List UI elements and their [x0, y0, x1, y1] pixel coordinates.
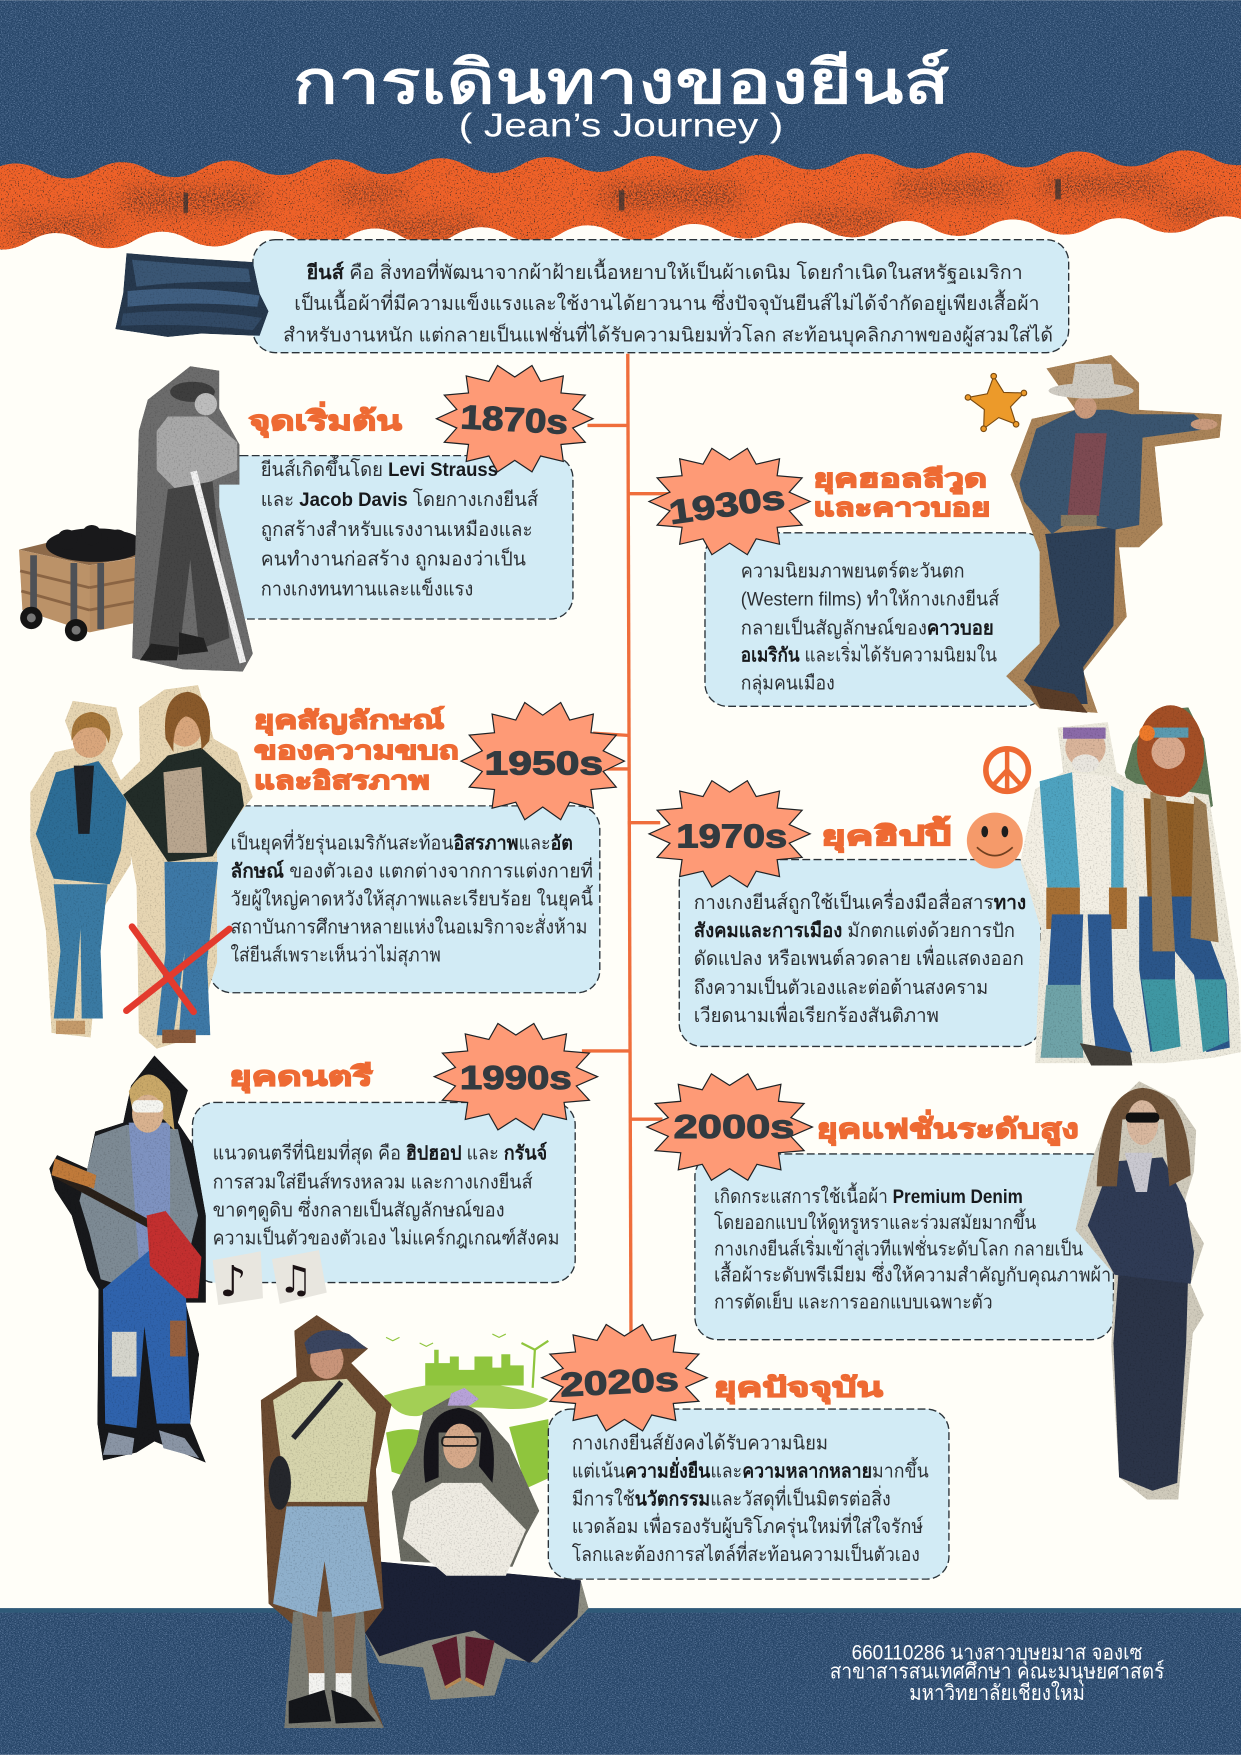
- orange torn wavy band: [0, 150, 1241, 250]
- photo: cowboy in denim: [1006, 355, 1222, 713]
- footer denim background: [0, 1608, 1241, 1755]
- subtitle: ( Jean’s Journey ): [459, 108, 783, 145]
- text: 1970s: สังคมและการเมือง มักตกแต่งด้วยการปัก: [694, 919, 1015, 942]
- intro text: สำหรับงานหนัก แต่กลายเป็นแฟชั่นที่ได้รับความนิยมทั่วโลก สะท้อนบุคลิกภาพของผู้สวมใส่ได้: [283, 321, 1053, 347]
- text: 1970s: ถึงความเป็นตัวเองและต่อต้านสงคราม: [694, 975, 988, 999]
- text: 2020s: มีการใช้นวัตกรรมและวัสดุที่เป็นมิตรต่อสิ่ง: [572, 1485, 891, 1511]
- heading: 1950s: ของความขบถ: [254, 738, 459, 765]
- icon: coal cart: [19, 525, 144, 641]
- footer credits: [830, 1641, 1164, 1705]
- badge: 1870s: [436, 366, 593, 472]
- photo: hippie couple: [1021, 705, 1241, 1065]
- heading: 2020s: ยุคปัจจุบัน: [714, 1373, 884, 1405]
- text: 1930s: กลุ่มคนเมือง: [741, 673, 835, 696]
- text: 1990s: แนวดนตรีที่นิยมที่สุด คือ ฮิปฮอป และ กรันจ์: [213, 1139, 547, 1165]
- text: 1870s: ยีนส์เกิดขึ้นโดย Levi Strauss: [261, 455, 498, 481]
- header denim background: [0, 0, 1241, 196]
- photo: young woman sitting: [364, 1388, 589, 1700]
- text: 2000s: เสื้อผ้าระดับพรีเมียม ซึ่งให้ความสำคัญกับคุณภาพผ้า: [714, 1260, 1111, 1287]
- panel: 2020s: [261, 1315, 949, 1728]
- panel: 1990s: [49, 1023, 598, 1463]
- badge: 1930s: 1930s: [667, 479, 787, 532]
- intro text: ยีนส์ คือ สิ่งทอที่พัฒนาจากผ้าฝ้ายเนื้อหยาบให้เป็นผ้าเดนิม โดยกำเนิดในสหรัฐอเมริกา: [306, 258, 1023, 284]
- text: 2020s: แวดล้อม เพื่อรองรับผู้บริโภครุ่นใหม่ที่ใส่ใจรักษ์: [572, 1513, 924, 1539]
- text: 1950s: วัยผู้ใหญ่คาดหวังให้สุภาพและเรียบร้อย ในยุคนี้: [231, 884, 593, 911]
- text: 1950s: ลักษณ์ ของตัวเอง แตกต่างจากการแต่งกายที่: [231, 858, 593, 883]
- heading: 2000s: ยุคแฟชั่นระดับสูง: [817, 1109, 1079, 1146]
- text: 2020s: กางเกงยีนส์ยังคงได้รับความนิยม: [572, 1431, 828, 1454]
- timeline spine and branches: [582, 354, 671, 1379]
- text: 1990s: ความเป็นตัวของตัวเอง ไม่แคร์กฎเกณฑ์สังคม: [213, 1226, 560, 1250]
- photo: grunge guitarist: [49, 1055, 206, 1463]
- icon: red cross mark: [126, 927, 229, 1012]
- heading: 1990s: ยุคดนตรี: [229, 1062, 373, 1094]
- text: 1870s: [261, 455, 538, 601]
- badge: 1930s: [649, 448, 810, 555]
- text: 1950s: ใส่ยีนส์เพราะเห็นว่าไม่สุภาพ: [231, 942, 441, 967]
- text: 1970s: กางเกงยีนส์ถูกใช้เป็นเครื่องมือสื่อสารทาง: [694, 889, 1026, 915]
- text: 1970s: เวียดนามเพื่อเรียกร้องสันติภาพ: [694, 1002, 939, 1027]
- title: [293, 48, 949, 145]
- heading: 1930s: ยุคฮอลลีวูด: [814, 465, 987, 495]
- text: 1970s: ดัดแปลง หรือเพนต์ลวดลาย เพื่อแสดงออก: [694, 945, 1024, 970]
- text: 2000s: [714, 1182, 1111, 1313]
- badge: 1970s: 1970s: [676, 818, 787, 855]
- icon: beamed notes card: [272, 1250, 327, 1304]
- footer credits: มหาวิทยาลัยเชียงใหม่: [909, 1681, 1085, 1705]
- text: 2020s: โลกและต้องการสไตล์ที่สะท้อนความเป็นตัวเอง: [572, 1541, 920, 1566]
- heading: 1950s: [254, 706, 459, 795]
- badge: 1990s: [434, 1023, 598, 1130]
- text: 2000s: โดยออกแบบให้ดูหรูหราและร่วมสมัยมากขึ้น: [714, 1208, 1036, 1235]
- text: 2000s: เกิดกระแสการใช้เนื้อผ้า Premium Denim: [714, 1182, 1023, 1208]
- badge: 1970s: [649, 781, 810, 887]
- badge: 1950s: 1950s: [485, 746, 603, 783]
- footer credits: สาขาสารสนเทศศึกษา คณะมนุษยศาสตร์: [830, 1660, 1164, 1685]
- text: 1970s: [694, 889, 1026, 1027]
- text: 2020s: แต่เน้นความยั่งยืนและความหลากหลายมากขึ้น: [572, 1456, 929, 1482]
- badge: 2000s: 2000s: [674, 1109, 795, 1146]
- badge: 1870s: 1870s: [460, 399, 569, 442]
- panel: 1930s: [649, 355, 1222, 713]
- panel: intro: [253, 240, 1069, 353]
- panel: 1870s: [19, 366, 593, 672]
- icon: sheriff star: [965, 373, 1027, 432]
- text: 1930s: (Western films) ทำให้กางเกงยีนส์: [741, 588, 999, 611]
- icon: music note card: ♪: [219, 1258, 246, 1307]
- text: 1950s: เป็นยุคที่วัยรุ่นอเมริกันสะท้อนอิสรภาพและอัต: [231, 830, 573, 856]
- text: 1870s: และ Jacob Davis โดยกางเกงยีนส์: [261, 488, 538, 511]
- panel: 1950s: [30, 685, 624, 1049]
- text: 1950s: สถาบันการศึกษาหลายแห่งในอเมริกาจะสั่งห้าม: [231, 913, 587, 938]
- text: 1990s: [213, 1139, 560, 1250]
- heading: 1950s: และอิสรภาพ: [254, 768, 430, 795]
- text: 1870s: คนทำงานก่อสร้าง ถูกมองว่าเป็น: [261, 546, 526, 571]
- text: 1930s: ความนิยมภาพยนตร์ตะวันตก: [741, 560, 965, 583]
- text: 1950s: [231, 830, 593, 967]
- icon: peace sign: [986, 749, 1028, 791]
- panel: 1970s: [649, 705, 1241, 1065]
- text: 1990s: ขาดๆดูดิบ ซึ่งกลายเป็นสัญลักษณ์ของ: [213, 1197, 505, 1223]
- heading: 1970s: ยุคฮิปปี้: [821, 816, 951, 853]
- badge: 2000s: [647, 1074, 812, 1180]
- photo: miner in jeans: [132, 366, 253, 672]
- text: 1930s: [741, 560, 999, 696]
- icon: green earth and city: [384, 1334, 551, 1488]
- heading: 1930s: และคาวบอย: [814, 495, 990, 522]
- text: 1870s: ถูกสร้างสำหรับแรงงานเหมืองและ: [261, 519, 533, 542]
- badge: 2020s: [542, 1325, 707, 1431]
- text: 1930s: อเมริกัน และเริ่มได้รับความนิยมใน: [741, 642, 997, 667]
- badge: 2020s: 2020s: [559, 1361, 680, 1404]
- photo: model in denim suit: [1075, 1081, 1204, 1500]
- text: 1870s: กางเกงทนทานและแข็งแรง: [261, 577, 473, 601]
- heading: 1930s: [814, 465, 990, 522]
- text: 2020s: [572, 1431, 929, 1566]
- heading: 1870s: จุดเริ่มต้น: [248, 401, 403, 438]
- text: 2000s: การตัดเย็บ และการออกแบบเฉพาะตัว: [714, 1289, 993, 1313]
- panel: 2000s: [647, 1074, 1204, 1500]
- icon: music note card: [213, 1251, 263, 1307]
- badge: 1990s: 1990s: [460, 1060, 572, 1097]
- photo: teen couple in denim: [30, 685, 253, 1049]
- icon: beamed notes card: ♫: [279, 1258, 313, 1302]
- photo: young man in denim shorts: [261, 1315, 392, 1728]
- text: 1930s: กลายเป็นสัญลักษณ์ของคาวบอย: [741, 616, 994, 640]
- badge: 1950s: [461, 703, 624, 820]
- title: การเดินทางของยีนส์: [293, 48, 949, 116]
- text: 1990s: การสวมใส่ยีนส์ทรงหลวม และกางเกงยีนส์: [213, 1171, 533, 1194]
- intro text: เป็นเนื้อผ้าที่มีความแข็งแรงและใช้งานได้ยาวนาน ซึ่งปัจจุบันยีนส์ไม่ได้จำกัดอยู่เพียงเสื้อผ้า: [294, 289, 1040, 316]
- intro text: [283, 258, 1053, 347]
- heading: 1950s: ยุคสัญลักษณ์: [254, 706, 444, 737]
- icon: smiley sticker: [967, 813, 1023, 869]
- icon: stacked jeans: [115, 253, 269, 337]
- text: 2000s: กางเกงยีนส์เริ่มเข้าสู่เวทีแฟชั่นระดับโลก กลายเป็น: [714, 1236, 1083, 1262]
- footer credits: 660110286 นางสาวบุษยมาส จองเซ: [852, 1641, 1143, 1666]
